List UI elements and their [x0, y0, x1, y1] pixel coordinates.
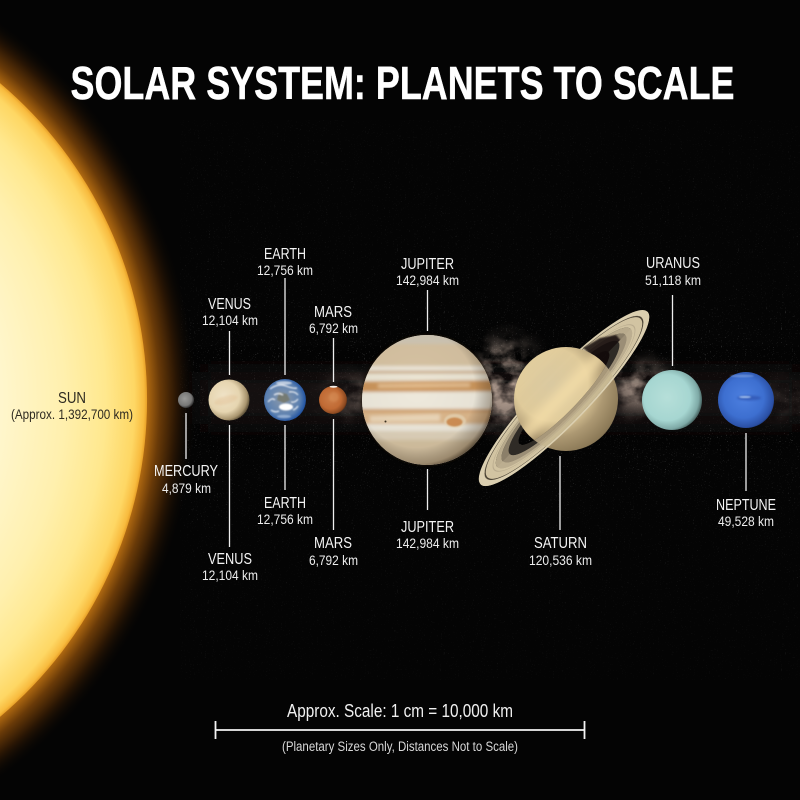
earth leaders [284, 278, 286, 490]
mercury label: 4,879 km [162, 481, 211, 496]
uranus label: 51,118 km [645, 273, 701, 288]
uranus label [645, 255, 701, 288]
uranus label: URANUS [646, 255, 700, 272]
earth bottom label: EARTH [264, 495, 306, 512]
mars top label [309, 304, 358, 336]
jupiter bottom label: 142,984 km [396, 536, 459, 551]
neptune label: NEPTUNE [716, 497, 776, 514]
saturn leader [559, 456, 561, 530]
mars [309, 304, 358, 568]
uranus [642, 255, 702, 430]
earth [257, 246, 313, 527]
mars bottom label [309, 535, 358, 568]
venus bottom label: VENUS [208, 551, 252, 568]
jupiter bottom label [396, 519, 459, 551]
earth top label: 12,756 km [257, 263, 313, 278]
saturn label: SATURN [534, 535, 587, 552]
venus top label: 12,104 km [202, 313, 258, 328]
mars top label: MARS [314, 304, 352, 321]
saturn rings, rear [466, 298, 662, 498]
venus leaders [228, 331, 230, 547]
venus [202, 296, 258, 583]
great red spot [444, 414, 466, 428]
sun label: SUN [58, 390, 86, 407]
mercury label: MERCURY [154, 463, 218, 480]
venus top label: VENUS [208, 296, 251, 313]
jupiter leaders [426, 290, 428, 510]
mercury [154, 392, 218, 496]
jupiter top label [396, 256, 459, 288]
jupiter [360, 258, 494, 550]
earth bottom label [257, 495, 313, 527]
mars bottom label: MARS [314, 535, 352, 552]
mercury leader [185, 413, 187, 459]
saturn label: 120,536 km [529, 553, 592, 568]
saturn [478, 310, 650, 567]
scale note: (Planetary Sizes Only, Distances Not to Scale) [282, 739, 518, 754]
planet shadow on rings [583, 335, 622, 372]
saturn label [529, 535, 592, 568]
sun [0, 20, 197, 780]
mercury label [154, 463, 218, 496]
earth top label: EARTH [264, 246, 306, 263]
saturn globe [514, 347, 618, 451]
venus bottom label [202, 551, 258, 583]
neptune leader [745, 433, 747, 491]
neptune label [716, 497, 776, 529]
venus top label [202, 296, 258, 328]
earth top label [257, 246, 313, 278]
sun label: (Approx. 1,392,700 km) [11, 407, 133, 422]
neptune [716, 372, 776, 529]
saturn rings, front [480, 312, 650, 486]
mars bottom label: 6,792 km [309, 553, 358, 568]
mars top label: 6,792 km [309, 321, 358, 336]
neptune label: 49,528 km [718, 514, 774, 529]
mars leaders [332, 338, 334, 530]
uranus leader [672, 295, 674, 366]
scale line [216, 721, 584, 739]
jupiter top label: 142,984 km [396, 273, 459, 288]
sun label [11, 390, 133, 422]
venus bottom label: 12,104 km [202, 568, 258, 583]
scale bar [216, 701, 584, 754]
scale heading: Approx. Scale: 1 cm = 10,000 km [287, 701, 513, 721]
jupiter top label: JUPITER [401, 256, 454, 273]
space background [180, 120, 800, 680]
jupiter bottom label: JUPITER [401, 519, 454, 536]
earth bottom label: 12,756 km [257, 512, 313, 527]
